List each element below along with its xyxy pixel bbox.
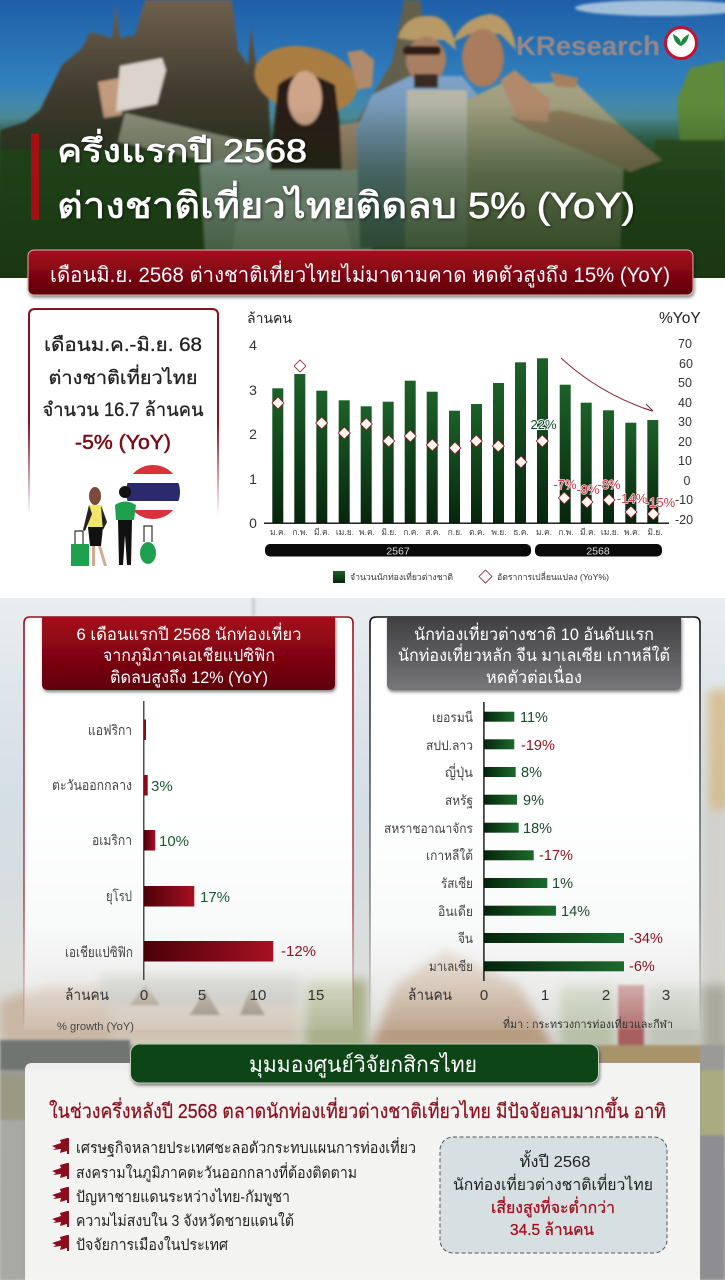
chart: country bars: 0 <box>480 987 488 1004</box>
chart: country bars: อินเดีย <box>438 904 473 919</box>
month labels: ส.ค. <box>425 527 441 537</box>
chart: country bars: เกาหลีใต้ <box>426 847 473 863</box>
chart: country bars: สปป.ลาว <box>426 738 473 753</box>
data labels: -8% <box>597 477 621 492</box>
chart: regional bars: เอเชียแปซิฟิก <box>65 944 133 960</box>
diamonds <box>272 360 659 520</box>
callout: full year forecast: ทั้งปี 2568 <box>520 1150 591 1171</box>
right axis: 10 <box>678 454 692 468</box>
factor: Middle East war <box>52 1162 357 1183</box>
month labels: ม.ค. <box>270 527 286 537</box>
factor: Thai Cambodia border: ปัญหาชายแดนระหว่างไทย-กัมพูชา <box>76 1188 290 1207</box>
logo: KResearch <box>516 28 696 61</box>
chart: country bars: 11% <box>520 710 548 726</box>
chart unit labels: %YoY <box>659 310 701 327</box>
heading: top 10: หดตัวต่อเนื่อง <box>486 665 582 687</box>
chart: regional bars <box>52 701 324 1033</box>
chart: regional bars: ล้านคน <box>65 987 109 1004</box>
month labels: พ.ย. <box>491 527 507 537</box>
bars <box>272 358 658 523</box>
year band 2567: 2567 <box>386 546 410 558</box>
heading: regional: ติดลบสูงถึง 12% (YoY) <box>110 668 268 688</box>
month labels: ต.ค. <box>469 527 485 537</box>
factor: economy: เศรษฐกิจหลายประเทศชะลอตัวกระทบแผนการท่องเที่ยว <box>76 1137 416 1157</box>
chart: country bars: -34% <box>629 931 663 947</box>
chart: regional bars: อเมริกา <box>92 832 132 848</box>
year band 2567 <box>265 544 531 558</box>
chart: regional bars: 17% <box>200 889 230 906</box>
month labels <box>270 527 663 537</box>
factor list <box>52 1137 416 1254</box>
year band 2568: 2568 <box>586 546 610 558</box>
phone and hand <box>98 78 122 118</box>
month labels: ก.ค. <box>403 527 419 537</box>
chart: country bars: จีน <box>458 931 473 946</box>
chart: regional bars: 0 <box>140 987 148 1004</box>
panel: January to June summary <box>29 309 218 566</box>
heading: top 10: นักท่องเที่ยวต่างชาติ 10 อันดับแรก <box>414 622 654 644</box>
month labels: มี.ค. <box>580 527 596 537</box>
left axis: 2 <box>249 426 257 442</box>
chart: country bars: 1% <box>552 876 573 892</box>
chart: regional bars: % growth (YoY) <box>57 1021 134 1033</box>
headline banner <box>28 250 693 295</box>
month labels: พ.ค. <box>624 527 640 537</box>
data labels: -7% <box>553 477 577 492</box>
chart: country bars: -19% <box>521 738 555 754</box>
right axis: 20 <box>678 435 692 449</box>
right axis <box>675 337 693 527</box>
right axis: -20 <box>675 513 693 527</box>
right axis: -10 <box>675 493 693 507</box>
left axis: 0 <box>249 515 257 531</box>
chart: country bars: 1 <box>541 987 549 1004</box>
lower photo background <box>0 598 725 1280</box>
panel: regional tourists <box>24 617 353 1033</box>
chart: country bars: 8% <box>521 765 542 781</box>
white section background <box>0 278 725 599</box>
panel: January to June summary: จำนวน 16.7 ล้านคน <box>42 400 204 421</box>
heading: top 10 <box>387 617 681 690</box>
title <box>57 129 635 226</box>
hero photo background <box>0 0 725 278</box>
data labels: 22% <box>530 417 557 432</box>
right axis: 30 <box>678 415 692 429</box>
factor: Middle East war: สงครามในภูมิภาคตะวันออกกลางที่ต้องติดตาม <box>76 1162 357 1183</box>
headline banner: เดือนมิ.ย. 2568 ต่างชาติเที่ยวไทยไม่มาตามคาด หดตัวสูงถึง 15% (YoY) <box>50 260 670 288</box>
chart: regional bars: แอฟริกา <box>88 722 132 738</box>
chart: country bars: 18% <box>523 821 552 837</box>
panel: January to June summary: -5% (YoY) <box>75 432 171 454</box>
chart: country bars: มาเลเซีย <box>429 959 473 974</box>
chart: country bars: -17% <box>539 848 573 864</box>
data labels: -9% <box>576 482 600 497</box>
logo: KResearch: KResearch <box>516 31 660 61</box>
chart: regional bars: 3% <box>151 778 173 795</box>
chart: country bars: 3 <box>662 987 670 1004</box>
heading: regional <box>42 617 335 690</box>
icon: Thai flag and travellers <box>71 465 180 566</box>
factor: domestic politics: ปัจจัยการเมืองในประเทศ <box>76 1236 228 1254</box>
month labels: เม.ย. <box>601 527 619 537</box>
woman <box>118 113 262 172</box>
data labels: -15% <box>645 495 676 510</box>
month labels: พ.ค. <box>359 527 375 537</box>
heading: regional: 6 เดือนแรกปี 2568 นักท่องเที่ยว <box>76 622 302 644</box>
chart: country bars <box>384 702 673 1031</box>
centre man <box>347 50 374 90</box>
right axis: 0 <box>684 474 691 488</box>
right axis: 60 <box>679 357 693 371</box>
legend: จำนวนนักท่องเที่ยวต่างชาติ <box>350 571 453 582</box>
title: ครึ่งแรกปี 2568 <box>57 129 307 169</box>
chart: regional bars: ยุโรป <box>106 888 132 905</box>
panel: January to June summary: ต่างชาติเที่ยวไทย <box>48 364 198 389</box>
chart: country bars: 2 <box>602 987 610 1004</box>
chart: regional bars: 10% <box>159 833 189 850</box>
month labels: เม.ย. <box>336 527 354 537</box>
chart: regional bars: 5 <box>198 987 206 1004</box>
heading: top 10: นักท่องเที่ยวหลัก จีน มาเลเซีย เกาหลีใต้ <box>398 643 670 665</box>
heading: regional: จากภูมิภาคเอเชียแปซิฟิก <box>103 646 275 666</box>
chart: country bars: 9% <box>523 793 544 809</box>
left axis: 1 <box>249 471 257 487</box>
data labels <box>530 417 676 510</box>
right axis: 40 <box>678 396 692 410</box>
month labels: มิ.ย. <box>381 527 397 537</box>
right man <box>467 82 625 248</box>
year band 2568 <box>535 544 662 558</box>
chart: monthly arrivals and YoY <box>247 310 701 583</box>
heading: KResearch view: มุมมองศูนย์วิจัยกสิกรไทย <box>249 1052 477 1078</box>
month labels: ก.พ. <box>292 527 308 537</box>
source note: ที่มา : กระทรวงการท่องเที่ยวและกีฬา <box>503 1016 673 1031</box>
chart: country bars: ล้านคน <box>408 987 452 1004</box>
heading: KResearch view <box>130 1044 598 1083</box>
chart: country bars: 14% <box>561 904 590 920</box>
callout: full year forecast <box>440 1137 667 1253</box>
legend <box>333 570 609 583</box>
panel: top 10 countries <box>370 617 700 1031</box>
chart: regional bars: 15 <box>308 987 324 1004</box>
left axis <box>249 337 257 531</box>
chart: country bars: รัสเซีย <box>441 876 473 891</box>
lead sentence: ในช่วงครึ่งหลังปี 2568 ตลาดนักท่องเที่ยวต่างชาติเที่ยวไทย มีปัจจัยลบมากขึ้น อาทิ <box>49 1097 666 1123</box>
chart: country bars: -6% <box>629 959 655 975</box>
chart: country bars: ญี่ปุ่น <box>445 763 473 781</box>
panel: January to June summary: เดือนม.ค.-มิ.ย. 68 <box>44 335 202 356</box>
chart: regional bars: -12% <box>281 943 316 960</box>
month labels: มี.ค. <box>314 527 330 537</box>
right axis: 50 <box>678 376 692 390</box>
chart unit labels: ล้านคน <box>247 310 292 326</box>
chart: regional bars: 10 <box>250 987 266 1004</box>
callout: full year forecast: เสี่ยงสูงที่จะต่ำกว่า <box>491 1196 615 1218</box>
chart: regional bars: ตะวันออกกลาง <box>52 777 132 793</box>
baseline <box>264 522 669 524</box>
month labels: ก.ย. <box>448 527 462 537</box>
left axis: 4 <box>249 337 257 353</box>
chart: country bars: เยอรมนี <box>432 710 473 725</box>
data labels: -14% <box>617 491 648 506</box>
factor: southern unrest: ความไม่สงบใน 3 จังหวัดชายแดนใต้ <box>76 1212 294 1230</box>
chart unit labels <box>247 310 701 327</box>
month labels: ธ.ค. <box>513 527 529 537</box>
chart: country bars: สหรัฐ <box>445 793 473 809</box>
panel: KResearch view <box>25 1044 700 1280</box>
right axis: 70 <box>678 337 692 351</box>
title: ต่างชาติเที่ยวไทยติดลบ 5% (YoY) <box>57 181 635 226</box>
callout: full year forecast: นักท่องเที่ยวต่างชาติเที่ยวไทย <box>453 1173 653 1194</box>
trend arrow <box>561 358 653 411</box>
month labels: ก.พ. <box>558 527 574 537</box>
title accent bar <box>31 134 39 220</box>
chart: country bars: สหราชอาณาจักร <box>384 821 473 836</box>
callout: full year forecast: 34.5 ล้านคน <box>510 1221 594 1239</box>
month labels: มิ.ย. <box>647 527 663 537</box>
month labels: ม.ค. <box>536 527 552 537</box>
left axis: 3 <box>249 382 257 398</box>
legend: อัตราการเปลี่ยนแปลง (YoY%) <box>497 571 609 582</box>
